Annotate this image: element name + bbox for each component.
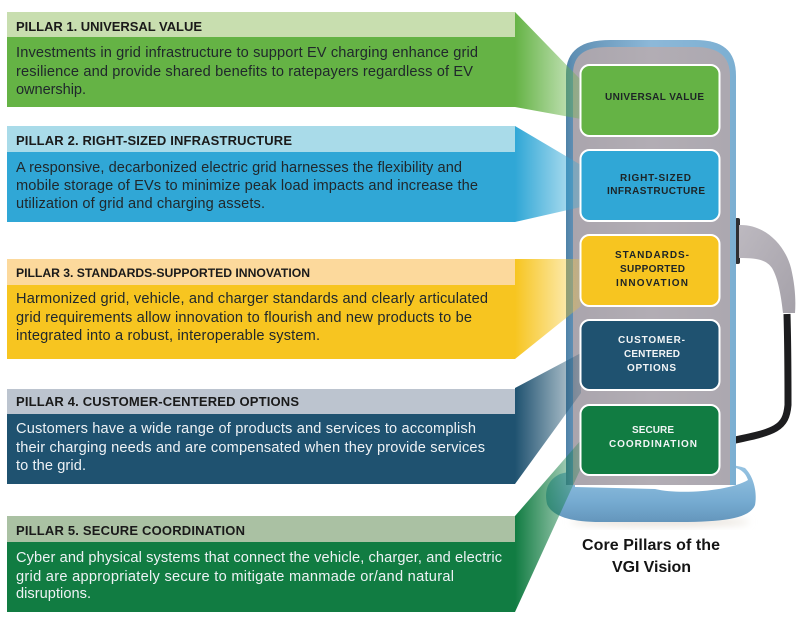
button: right-sized infrastructure: INFRASTRUCTURE — [607, 186, 705, 197]
text: pillar 5 description: grid are appropriately secure to mitigate manmade or/and natural — [16, 569, 454, 585]
text: pillar 5 description — [16, 550, 502, 602]
charging station illustration — [546, 40, 795, 526]
text: pillar 5 description: disruptions. — [16, 586, 91, 602]
text: pillar 5 description: Cyber and physical systems that connect the vehicle, charger, and electric — [16, 550, 502, 566]
heading: pillar 2: PILLAR 2. RIGHT-SIZED INFRASTRUCTURE — [16, 133, 292, 148]
caption: Core Pillars of the — [582, 537, 720, 554]
heading: pillar 5: PILLAR 5. SECURE COORDINATION — [16, 523, 245, 538]
station shell — [566, 40, 736, 485]
heading: pillar 1: PILLAR 1. UNIVERSAL VALUE — [16, 19, 202, 34]
connector wedge: pillar 3 — [515, 259, 581, 359]
text: pillar 2 description: A responsive, decarbonized electric grid harnesses the flexibility and — [16, 160, 462, 176]
connector wedge: pillar 4 — [515, 353, 581, 484]
button: secure coordination — [580, 405, 720, 475]
charging cable — [730, 314, 788, 441]
text: pillar 1 description: Investments in grid infrastructure to support EV charging enhance grid — [16, 45, 478, 61]
text: pillar 1 description: resilience and provide shared benefits to ratepayers regardless of EV — [16, 64, 473, 80]
panel: pillar 1 — [7, 12, 515, 107]
text: pillar 2 description: utilization of grid and charging assets. — [16, 196, 265, 212]
button: secure coordination: SECURE — [632, 425, 674, 436]
caption: VGI Vision — [612, 559, 691, 576]
text: pillar 3 description: integrated into a robust, interoperable system. — [16, 328, 320, 344]
base highlight — [575, 468, 748, 492]
charger handle — [739, 225, 795, 313]
button: universal value — [580, 65, 720, 136]
button: customer-centered options: CENTERED — [624, 349, 680, 360]
caption — [582, 537, 720, 576]
text: pillar 3 description — [16, 291, 488, 344]
text: pillar 4 description: their charging needs and are compensated when they provide services — [16, 440, 485, 456]
text: pillar 1 description — [16, 45, 478, 98]
base shadow — [570, 518, 750, 526]
button: customer-centered options: CUSTOMER- — [618, 335, 685, 346]
text: pillar 3 description: grid requirements allow innovation to flourish and new products to be — [16, 310, 472, 326]
station face — [573, 47, 730, 485]
text: pillar 2 description: mobile storage of EVs to minimize peak load impacts and increase the — [16, 178, 478, 194]
button: customer-centered options — [580, 320, 720, 390]
button: standards-supported innovation: INNOVATION — [616, 278, 688, 289]
text: pillar 1 description: ownership. — [16, 82, 86, 98]
panel: pillar 3 — [7, 259, 515, 359]
button: right-sized infrastructure — [580, 150, 720, 221]
connector wedge: pillar 1 — [515, 12, 581, 119]
button: standards-supported innovation — [580, 235, 720, 306]
heading: pillar 4: PILLAR 4. CUSTOMER-CENTERED OPTIONS — [16, 394, 299, 409]
panel: pillar 5 — [7, 516, 515, 612]
button: standards-supported innovation: STANDARDS- — [615, 250, 689, 261]
panel: pillar 2 — [7, 126, 515, 222]
heading: pillar 3: PILLAR 3. STANDARDS-SUPPORTED INNOVATION — [16, 266, 310, 280]
text: pillar 4 description: Customers have a wide range of products and services to accomplish — [16, 421, 476, 437]
button: secure coordination: COORDINATION — [609, 439, 697, 450]
button: universal value: UNIVERSAL VALUE — [605, 92, 704, 103]
text: pillar 2 description — [16, 160, 478, 212]
connector wedge: pillar 2 — [515, 126, 581, 222]
connector wedge: pillar 5 — [515, 440, 581, 612]
button: standards-supported innovation: SUPPORTED — [620, 264, 685, 275]
panel: pillar 4 — [7, 389, 515, 484]
connector collar — [735, 218, 740, 264]
text: pillar 4 description — [16, 421, 485, 474]
text: pillar 3 description: Harmonized grid, vehicle, and charger standards and clearly articulated — [16, 291, 488, 307]
button: right-sized infrastructure: RIGHT-SIZED — [620, 173, 691, 184]
station base — [546, 463, 756, 522]
text: pillar 4 description: to the grid. — [16, 458, 86, 474]
button: customer-centered options: OPTIONS — [627, 363, 676, 374]
